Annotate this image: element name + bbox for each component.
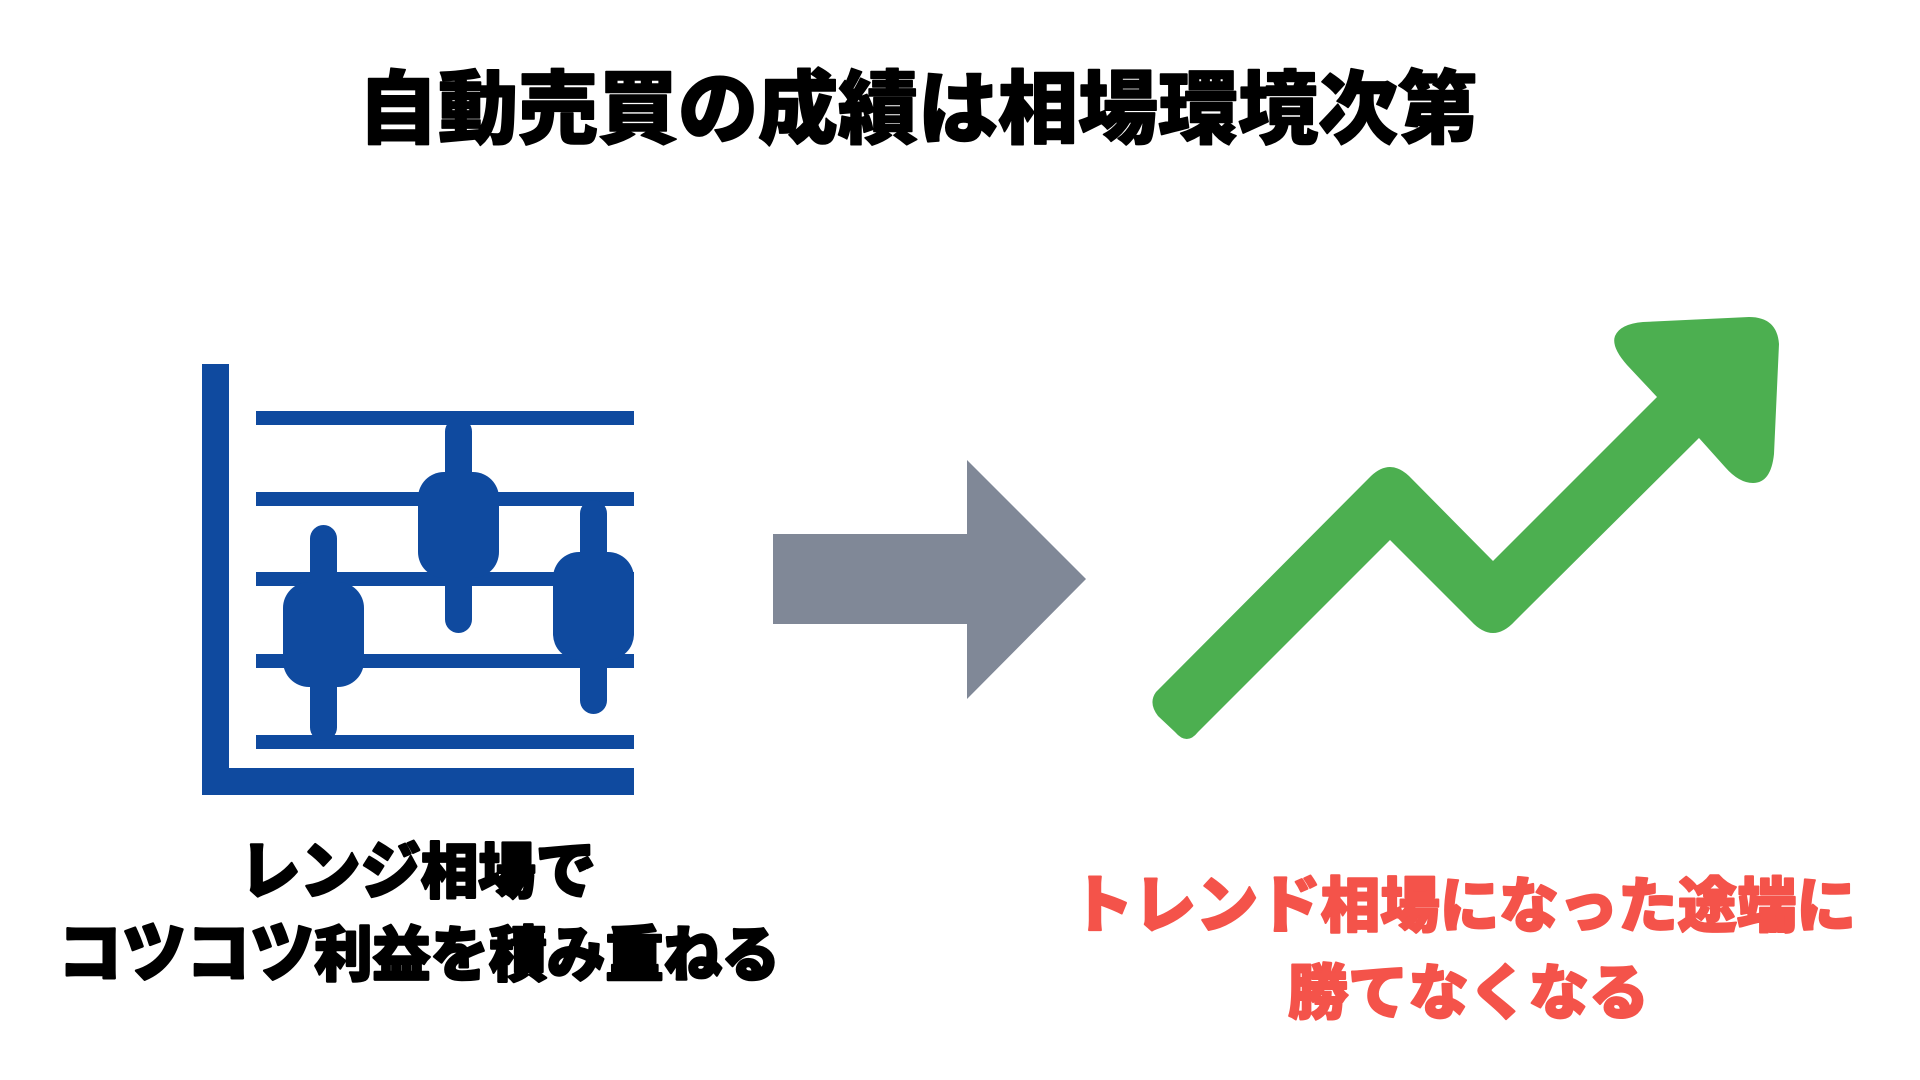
label: range market line 2: コツコツ利益を積み重ねる bbox=[58, 916, 780, 990]
arrow: gray right arrow bbox=[773, 460, 1086, 699]
label: trend market line 2: 勝てなくなる bbox=[1288, 960, 1649, 1027]
title: 自動売買の成績は相場環境次第 bbox=[358, 65, 1478, 154]
icon: candlestick chart bbox=[202, 364, 634, 795]
panel: range market bbox=[58, 364, 780, 990]
label: trend market line 1: トレンド相場になった途端に bbox=[1071, 871, 1856, 941]
panel: trend market bbox=[1071, 317, 1856, 1027]
label: range market line 1: レンジ相場で bbox=[240, 837, 596, 907]
icon: green rising arrow bbox=[1152, 317, 1779, 739]
